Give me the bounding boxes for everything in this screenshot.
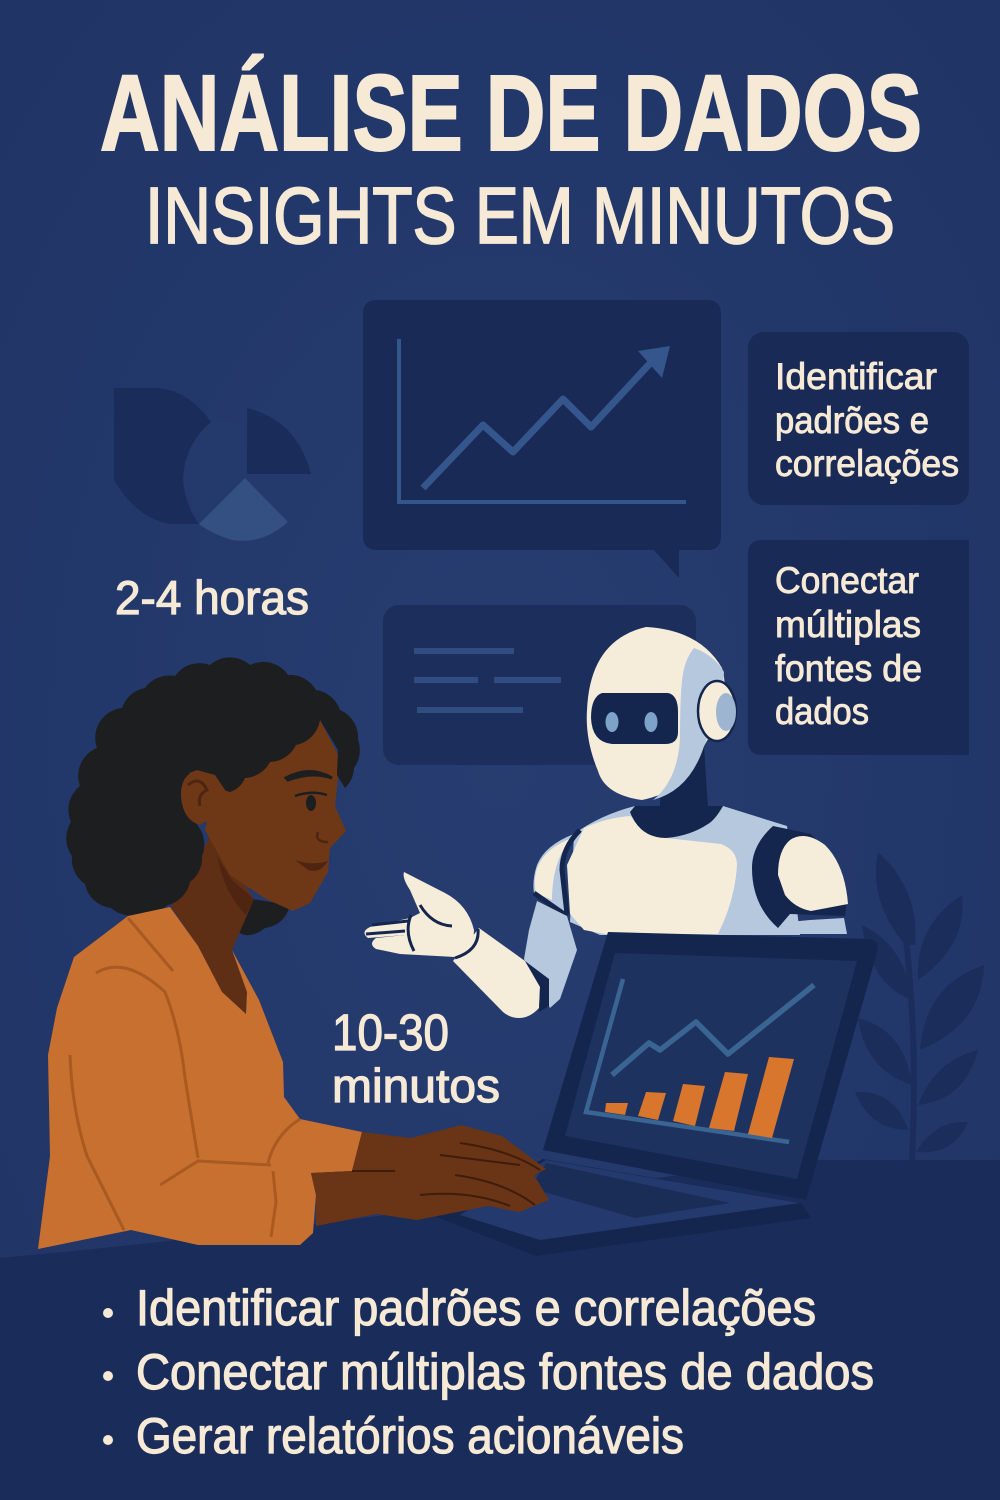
bar chart [605,1057,794,1138]
panel: conectar múltiplas fontes: Conectar [775,560,919,601]
illustration: laptop [434,932,878,1256]
robot right shoulder [752,826,847,928]
panel: identificar padrões: Identificar [775,356,937,397]
woman hair [66,657,360,916]
woman eyebrow, eye, nose and mouth [286,772,332,871]
bullet list [103,1280,874,1464]
panel: conectar múltiplas fontes: fontes de [775,648,922,689]
woman face [205,720,346,911]
illustration: plant [855,852,984,1160]
bullet list: Gerar relatórios acionáveis [136,1408,684,1464]
illustration: woman [38,657,549,1249]
label: 10-30 minutos: 10-30 [332,1004,449,1061]
robot torso [570,806,800,935]
panel: line chart speech bubble [363,300,721,578]
label: 10-30 minutos [332,1004,500,1112]
robot forearm [453,928,540,1018]
panel: conectar múltiplas fontes: múltiplas [775,604,921,645]
woman arms and hands [311,1125,549,1226]
label: 2-4 horas: 2-4 horas [115,571,309,624]
panel: conectar múltiplas fontes: dados [775,691,869,732]
robot collar [630,806,723,838]
panel: conectar múltiplas fontes [748,540,969,755]
robot head [587,627,725,800]
panel: text lines card [383,605,696,765]
panel: identificar padrões: padrões e [775,400,929,441]
panel: identificar padrões [748,332,969,505]
panel: identificar padrões: correlações [775,443,959,484]
robot visor [591,693,678,744]
hair under chin [238,899,290,935]
table [0,1160,1000,1500]
bullet list: Identificar padrões e correlações [136,1280,816,1336]
robot hand [364,872,474,957]
illustration: robot [364,627,848,1018]
robot ear [698,681,736,741]
woman sweater [38,907,362,1249]
robot left shoulder [533,834,574,916]
label: 10-30 minutos: minutos [332,1059,500,1112]
icon: pie chart [114,388,311,541]
woman neck [171,833,254,1014]
woman ear [181,770,225,825]
robot upper arm [524,901,577,1008]
robot neck [660,746,708,815]
bullet list: Conectar múltiplas fontes de dados [136,1344,874,1400]
